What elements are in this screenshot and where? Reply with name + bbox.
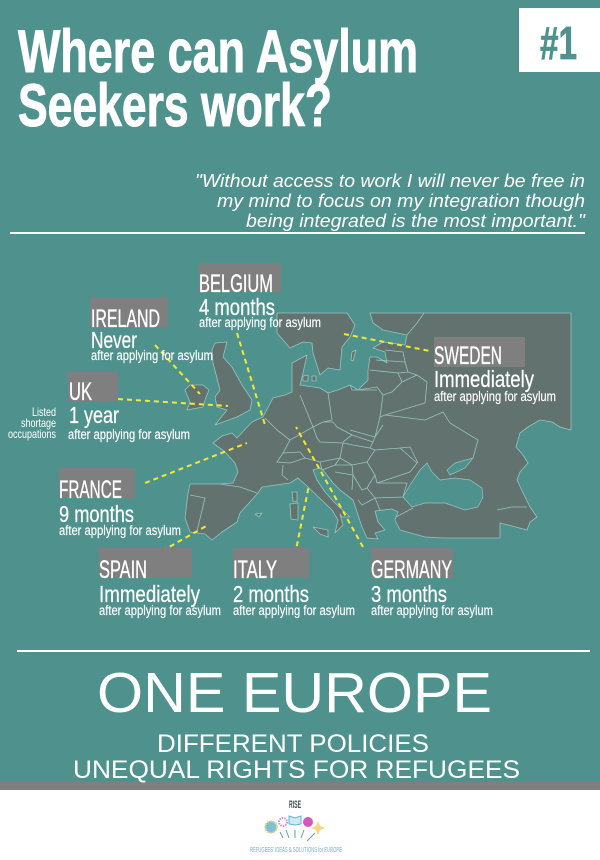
label: Ireland: IRELAND <box>91 305 160 333</box>
label: Belgium: BELGIUM <box>199 270 273 298</box>
label: Ireland: after applying for asylum <box>91 348 213 363</box>
note: listed shortage occupations: shortage <box>21 416 56 430</box>
label: France <box>59 468 181 538</box>
label: Sweden: Immediately <box>434 366 534 392</box>
note: listed shortage occupations: Listed <box>32 405 56 419</box>
badge: number 1: #1 <box>540 17 577 69</box>
closing headline: ONE EUROPE <box>97 661 492 725</box>
label: UK: after applying for asylum <box>68 427 190 442</box>
label: Spain <box>99 548 221 618</box>
title: Where can Asylum <box>18 18 418 85</box>
label: Italy <box>233 548 355 618</box>
label: Italy: ITALY <box>233 556 277 584</box>
label: Germany <box>371 548 493 618</box>
label: Sweden <box>434 337 556 404</box>
closing subheading: DIFFERENT POLICIES <box>157 730 429 758</box>
connector lines <box>118 333 430 555</box>
quote: "Without access to work I will never be free in <box>195 170 585 191</box>
logo: RISE: REFUGEES' IDEAS & SOLUTIONS for EUROPE <box>250 847 342 854</box>
label: Italy: after applying for asylum <box>233 603 355 618</box>
closing subheading <box>73 730 520 784</box>
map of Europe <box>185 313 571 540</box>
label: Sweden: after applying for asylum <box>434 389 556 404</box>
label: Belgium: after applying for asylum <box>199 315 321 330</box>
quote: my mind to focus on my integration though <box>217 190 585 211</box>
label: Ireland: Never <box>91 327 137 353</box>
label: UK: UK <box>69 378 92 406</box>
label: Germany: after applying for asylum <box>371 603 493 618</box>
title: Seekers work? <box>18 72 332 139</box>
label: Spain: after applying for asylum <box>99 603 221 618</box>
closing subheading: UNEQUAL RIGHTS FOR REFUGEES <box>73 756 520 784</box>
title <box>18 18 418 139</box>
quote: being integrated is the most important." <box>246 210 587 231</box>
label: Spain: SPAIN <box>99 556 147 584</box>
note: listed shortage occupations: occupations <box>8 427 56 441</box>
label: France: FRANCE <box>59 476 122 504</box>
label: France: 9 months <box>59 501 134 527</box>
label: Ireland <box>90 297 213 363</box>
label: UK: 1 year <box>69 402 119 428</box>
label: France: after applying for asylum <box>59 523 181 538</box>
label: Germany: 3 months <box>371 581 447 607</box>
badge: number 1 <box>519 8 600 72</box>
label: Germany: GERMANY <box>371 556 452 584</box>
logo: RISE: RISE <box>289 799 301 811</box>
label: Sweden: SWEDEN <box>434 342 502 370</box>
label: UK <box>68 372 190 442</box>
label: Belgium: 4 months <box>199 294 275 320</box>
logo: RISE <box>250 799 342 854</box>
label: Spain: Immediately <box>99 581 200 607</box>
label: Belgium <box>199 263 321 330</box>
quote <box>195 170 587 231</box>
note: listed shortage occupations <box>8 405 56 441</box>
label: Italy: 2 months <box>233 581 309 607</box>
